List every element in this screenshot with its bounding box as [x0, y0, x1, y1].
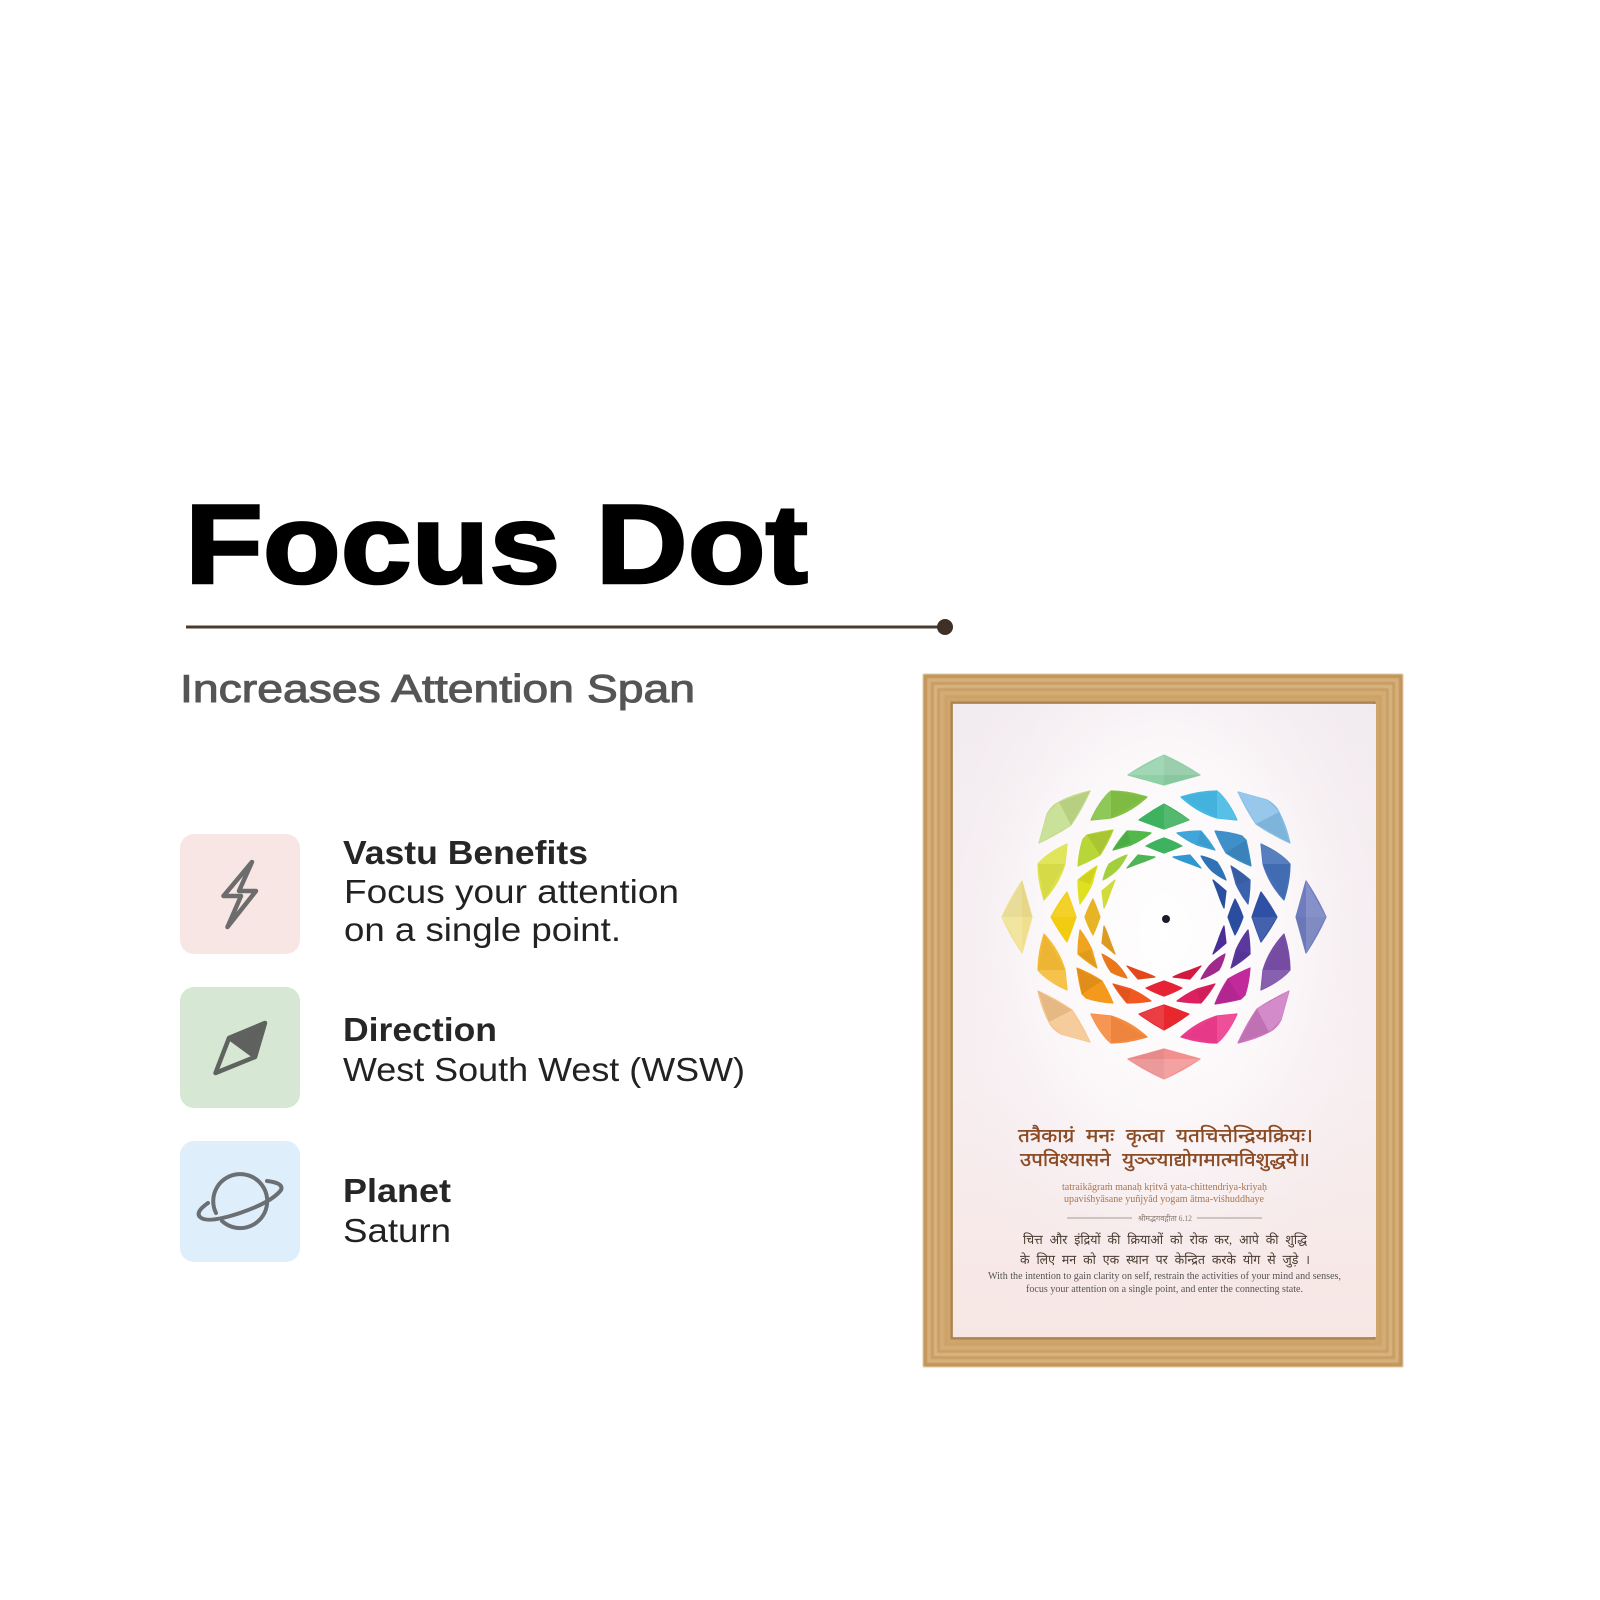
text: vastu benefits — [343, 834, 679, 948]
verse reference: श्रीमद्भगवद्गीता 6.12 — [1138, 1213, 1192, 1223]
text: direction: Direction — [343, 1011, 497, 1048]
text: planet: Saturn — [343, 1212, 451, 1249]
transliteration: upaviśhyāsane yuñjyād yogam ātma-viśhuddhaye — [1064, 1193, 1264, 1205]
transliteration: tatraikāgraṁ manaḥ kṛitvā yata-chittendriya-kriyaḥ — [1062, 1181, 1267, 1193]
panel: direction — [180, 987, 745, 1108]
title: Focus Dot — [185, 482, 808, 607]
sanskrit verse — [1018, 1124, 1313, 1172]
icon tile: compass needle — [180, 987, 300, 1108]
panel: vastu benefits — [180, 834, 679, 954]
english translation: focus your attention on a single point, and enter the connecting state. — [1026, 1284, 1303, 1295]
wood frame — [923, 674, 1403, 1367]
icon tile: lightning bolt — [180, 834, 300, 954]
sanskrit verse: उपविश्यासने युञ्ज्याद्योगमात्मविशुद्धये॥ — [1020, 1148, 1310, 1172]
title rule with end dot — [186, 619, 953, 635]
transliteration — [1062, 1181, 1267, 1205]
english translation — [988, 1271, 1341, 1295]
icon tile: saturn — [180, 1141, 300, 1262]
text: planet — [343, 1172, 451, 1249]
text: vastu benefits: Vastu Benefits — [343, 834, 588, 871]
hindi translation — [1020, 1232, 1310, 1268]
rainbow rosette — [1002, 755, 1326, 1079]
text: planet: Planet — [343, 1172, 451, 1209]
subtitle: Increases Attention Span — [180, 668, 695, 711]
text: direction: West South West (WSW) — [343, 1051, 745, 1088]
text: vastu benefits: on a single point. — [344, 911, 621, 948]
hindi translation: चित्त और इंद्रियों की क्रियाओं को रोक कर, आपे की शुद्धि — [1023, 1232, 1308, 1248]
text: direction — [343, 1011, 745, 1088]
panel: planet — [180, 1141, 451, 1262]
poster mat — [953, 704, 1376, 1337]
hindi translation: के लिए मन को एक स्थान पर केन्द्रित करके योग से जुड़े । — [1020, 1252, 1310, 1268]
text: vastu benefits: Focus your attention — [344, 873, 679, 910]
english translation: With the intention to gain clarity on self, restrain the activities of your mind and senses, — [988, 1271, 1341, 1282]
framed poster — [923, 674, 1403, 1367]
sanskrit verse: तत्रैकाग्रं मनः कृत्वा यतचित्तेन्द्रियक्रियः। — [1018, 1124, 1313, 1148]
